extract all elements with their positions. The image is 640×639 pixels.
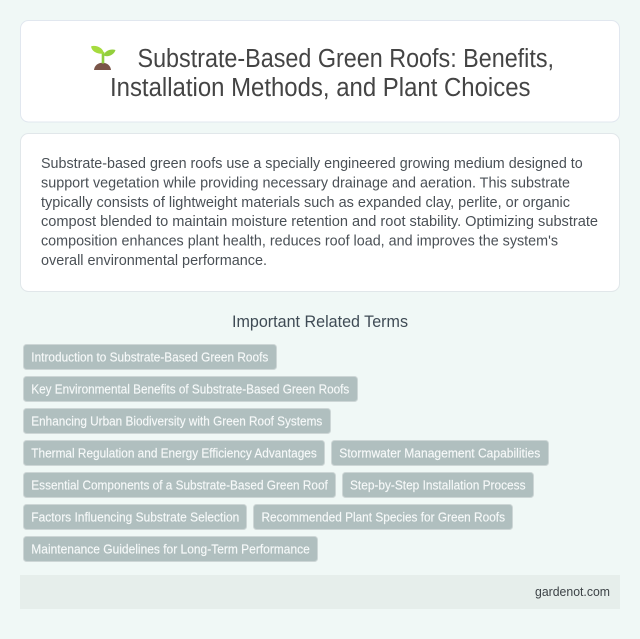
description text xyxy=(41,155,598,269)
tag: stormwater: Stormwater Management Capabilities xyxy=(339,446,540,460)
tag: plant species: Recommended Plant Species for Green Roofs xyxy=(262,510,505,524)
tag: thermal regulation xyxy=(24,440,324,466)
tag: biodiversity xyxy=(24,408,330,434)
tag: essential components xyxy=(24,472,336,498)
tag: introduction xyxy=(24,344,276,370)
panel: description xyxy=(20,134,620,292)
tag: plant species xyxy=(254,504,512,530)
title text: Installation Methods, and Plant Choices xyxy=(110,74,530,102)
tag: maintenance: Maintenance Guidelines for Long-Term Performance xyxy=(31,542,310,556)
title text: Substrate-Based Green Roofs: Benefits, xyxy=(138,45,554,73)
title text xyxy=(110,45,554,102)
related terms tags xyxy=(24,344,548,562)
panel: title xyxy=(20,20,620,122)
tag: environmental benefits: Key Environmental Benefits of Substrate-Based Green Roofs xyxy=(31,382,349,396)
description text: support vegetation while providing necessary drainage and aeration. This substrate xyxy=(41,174,570,191)
description text: typically consists of lightweight materials such as expanded clay, perlite, or organic xyxy=(41,194,570,211)
footer source text: gardenot.com xyxy=(535,584,610,599)
description text: Substrate-based green roofs use a specially engineered growing medium designed to xyxy=(41,155,583,172)
tag: essential components: Essential Components of a Substrate-Based Green Roof xyxy=(31,478,328,492)
icon: seedling xyxy=(91,46,116,70)
tag: installation process: Step-by-Step Installation Process xyxy=(350,478,526,492)
tag: substrate selection xyxy=(24,504,246,530)
description text: composition enhances plant health, reduces roof load, and improves the system's xyxy=(41,233,558,250)
tag: installation process xyxy=(342,472,534,498)
tag: thermal regulation: Thermal Regulation and Energy Efficiency Advantages xyxy=(31,446,317,460)
tag: introduction: Introduction to Substrate-Based Green Roofs xyxy=(31,350,268,364)
footer xyxy=(20,575,620,609)
tag: stormwater xyxy=(332,440,548,466)
tag: biodiversity: Enhancing Urban Biodiversity with Green Roof Systems xyxy=(31,414,322,428)
tag: maintenance xyxy=(24,536,318,562)
tag: substrate selection: Factors Influencing Substrate Selection xyxy=(31,510,239,524)
description text: overall environmental performance. xyxy=(41,252,267,269)
description text: compost blended to maintain moisture retention and root stability. Optimizing substrate xyxy=(41,213,598,230)
tag: environmental benefits xyxy=(24,376,358,402)
heading: important related terms: Important Related Terms xyxy=(232,313,408,331)
